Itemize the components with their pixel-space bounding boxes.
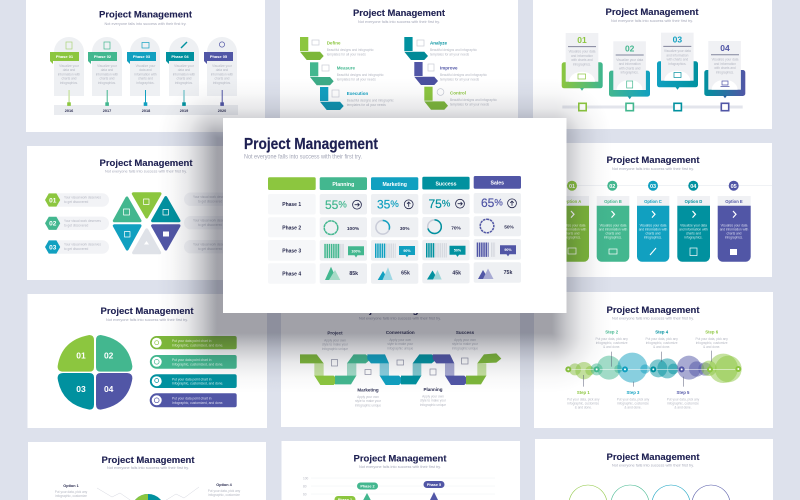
phase 05 card: Visualize your: [212, 64, 233, 68]
label: marketing: Apply your own: [357, 395, 379, 399]
card 01: with charts and: [571, 58, 593, 62]
option C: infographics.: [644, 236, 662, 240]
panel: peak chart (cropped): Phase 2: [360, 485, 375, 489]
step: execution: Beautiful designs and infographic: [347, 98, 394, 102]
bar item 1: [150, 336, 237, 349]
label: planning: infographic unique: [420, 403, 446, 407]
option D: Option D: [685, 199, 702, 204]
step 1 label: infographic, customize: [567, 402, 599, 406]
phase 03 card: charts and: [138, 77, 153, 81]
card 01: 01: [577, 35, 587, 45]
option E: 05: [731, 184, 737, 190]
label: project: Apply your own: [324, 338, 346, 342]
hexagon chart: [114, 194, 179, 253]
list item 02: 02: [49, 221, 57, 228]
center panel: project management table: [223, 118, 566, 313]
panel: option cards: Not everyone falls into success with their first try.: [612, 167, 694, 171]
petal chart: 02: [104, 351, 114, 361]
zigzag ribbon: [300, 353, 501, 385]
card 01: [562, 33, 603, 111]
list item 01: to get discovered: [64, 200, 89, 204]
column: success: %: [442, 198, 451, 210]
bar item 1: Put your data point chart in: [172, 339, 212, 343]
step: analyze: templates for all your needs: [430, 52, 470, 56]
card 02: with charts and: [619, 66, 641, 70]
card 02: 02: [625, 43, 635, 53]
label: conversation: infographic unique: [387, 346, 414, 350]
label: conversation: Conversation: [386, 330, 415, 335]
row labels: Phase 3: [282, 248, 301, 254]
step: execution: Execution: [347, 91, 368, 96]
bubble chart: [566, 351, 742, 387]
step: improve: templates for all your needs: [440, 78, 480, 82]
panel: numbered cards on timeline: Not everyone falls into success with their first try.: [611, 19, 693, 23]
right pills: [184, 192, 244, 253]
step 4 label: Put your data, pick any: [645, 337, 678, 341]
panel: donut options (cropped): [28, 442, 266, 500]
petal chart: 04: [104, 384, 114, 394]
right pills: to get discovered: [198, 200, 223, 204]
card 04: 04: [720, 43, 730, 53]
panel: hexagon of triangles: [27, 146, 266, 280]
phase 02 card: data and: [101, 68, 113, 72]
option D: 04: [690, 184, 697, 190]
panel: four petal chart: [28, 294, 267, 428]
petal chart: 01: [76, 351, 86, 361]
phase 05 card: 2020: [218, 109, 226, 113]
phase 04 card: infographics.: [175, 81, 193, 85]
phase 02 card: Phase 02: [94, 54, 112, 59]
list item 01: 01: [49, 197, 57, 204]
label: success: infographic unique: [452, 346, 478, 350]
option A: and information with: [558, 228, 586, 232]
list item 01: Your visual work deserves: [64, 196, 101, 200]
header row: [268, 176, 521, 190]
list item 03: to get discovered: [64, 247, 89, 251]
step: control: [424, 87, 497, 110]
option E: Visualize your data: [721, 224, 748, 228]
column: success: [422, 194, 470, 283]
panel: overlapping circles steps: Project Management: [606, 305, 700, 316]
phase 04 card: data and: [178, 68, 190, 72]
panel: timeline of phases: Not everyone falls into success with their first try.: [104, 22, 186, 26]
panel: arcs (cropped): Project Management: [606, 452, 700, 463]
bar item 4: Infographic, customized, and done.: [172, 401, 223, 405]
label: marketing: infographic unique: [355, 403, 381, 407]
card 03: Visualize your data: [664, 49, 691, 53]
step 3 label: infographic, customize: [617, 402, 649, 406]
panel: elbow process steps: Not everyone falls into success with their first try.: [358, 20, 440, 24]
phase 01 card: information with: [58, 72, 80, 76]
petal chart: [58, 335, 132, 410]
step 3 label: [617, 390, 650, 410]
card 01: infographics.: [573, 62, 591, 66]
option C: Visualize your data: [640, 224, 667, 228]
column: sales: 75k: [504, 270, 512, 276]
step 1 label: [567, 390, 600, 410]
column: success: 50%: [454, 249, 462, 253]
card 03: 03: [673, 34, 682, 44]
row labels: Phase 1: [282, 202, 301, 208]
step: improve: [414, 62, 487, 85]
panel: donut options (cropped): Option 1: [63, 484, 79, 488]
card 02: and information: [619, 62, 641, 66]
step: analyze: [404, 37, 477, 60]
panel: elbow process steps: [280, 0, 518, 119]
column: planning: %: [338, 199, 347, 210]
bar item 3: [150, 374, 237, 388]
header row: Success: [435, 181, 457, 187]
phase 03 card: information with: [134, 72, 157, 76]
column: marketing: 30%: [400, 226, 410, 232]
step 6 label: infographic, customize: [696, 341, 728, 345]
list item 01: [45, 193, 109, 207]
label: marketing: style to make your: [355, 399, 382, 403]
label: success: [452, 330, 479, 364]
panel: four petal chart: Not everyone falls into success with their first try.: [106, 318, 188, 322]
option D: charts and: [686, 232, 701, 236]
option B: and information with: [599, 228, 627, 232]
right pills: to get discovered: [198, 247, 223, 251]
bar item 3: Infographic, customized, and done.: [172, 382, 223, 386]
step 2 label: & and done.: [603, 345, 620, 349]
panel: zigzag arrow flow: Project Management: [354, 305, 447, 316]
phase 05 card: [204, 37, 237, 113]
step 4 label: & and done.: [653, 345, 670, 349]
panel: zigzag arrow flow: [281, 290, 520, 427]
right pills: Your visual work deserves: [193, 218, 230, 222]
bar item 2: [150, 355, 237, 369]
phase 01 card: 2016: [65, 109, 73, 113]
step 2 label: infographic, customize: [596, 341, 628, 345]
bar item 3: Put your data point chart in: [172, 377, 212, 381]
option E: [718, 181, 751, 262]
header row: Planning: [332, 182, 354, 188]
column: sales: 65: [481, 196, 494, 210]
phase 05 card: Phase 05: [210, 54, 228, 59]
option B: Visualize your data: [600, 224, 627, 228]
right pills: Your visual work deserves: [193, 195, 230, 199]
label: conversation: [386, 330, 415, 365]
option A: charts and: [565, 232, 580, 236]
list item 03: Your visual work deserves: [64, 242, 101, 246]
step 5 label: infographic, customize: [667, 402, 699, 406]
column: sales: 50%: [504, 225, 515, 231]
panel: arcs (cropped): Not everyone falls into success with their first try.: [612, 464, 694, 468]
card 01: and information: [571, 54, 593, 58]
label: conversation: Apply your own: [389, 338, 411, 342]
card 03: and information: [666, 53, 689, 57]
label: planning: Planning: [424, 387, 443, 392]
column: marketing: %: [390, 199, 399, 210]
step 3 label: Put your data, pick any: [617, 398, 650, 402]
column: marketing: 35: [377, 198, 390, 212]
step: measure: Measure: [337, 66, 355, 70]
right pills: Your visual work deserves: [193, 242, 230, 246]
phase 03 card: [127, 37, 160, 113]
phase 01 card: Phase 01: [56, 54, 74, 59]
option B: infographics.: [604, 236, 622, 240]
panel: four petal chart: Project Management: [100, 306, 194, 317]
panel: arcs (cropped): [535, 439, 773, 500]
subtitle: Not everyone falls into success with their first try.: [244, 154, 362, 160]
label: project: style to make your: [322, 342, 349, 346]
phase 02 card: information with: [96, 72, 118, 76]
step 5 label: [667, 390, 700, 410]
step: execution: templates for all your needs: [347, 103, 386, 107]
step: improve: Beautiful designs and infographic: [440, 73, 487, 77]
header row: Marketing: [382, 182, 407, 188]
phase 05 card: charts and: [215, 77, 230, 81]
panel: peak chart (cropped): Project Management: [354, 454, 447, 465]
card 02: Visualize your data: [616, 58, 643, 62]
panel: peak chart (cropped): Not everyone falls into success with their first try.: [359, 465, 441, 469]
phase 01 card: infographics.: [60, 81, 78, 85]
option D: [677, 181, 710, 262]
panel: donut options (cropped): infographic, customize: [208, 493, 240, 497]
column: sales: [474, 193, 521, 283]
phase 05 card: infographics.: [213, 81, 231, 85]
column: marketing: 65k: [401, 271, 410, 277]
list item 03: 03: [49, 244, 57, 251]
option E: and information with: [720, 228, 748, 232]
bar item 2: Infographic, customized, and done.: [172, 362, 223, 366]
bar item 1: Infographic, customized, and done.: [172, 343, 223, 347]
panel: peak chart (cropped): 80: [303, 484, 307, 488]
column: planning: [320, 194, 367, 284]
column: planning: 100%: [351, 249, 361, 253]
label: project: Project: [327, 331, 343, 336]
row labels: [268, 194, 316, 284]
step: define: Define: [327, 40, 341, 46]
panel: overlapping circles steps: [534, 292, 773, 428]
column: marketing: 90%: [403, 249, 411, 253]
step: control: templates for all your needs: [450, 102, 490, 106]
step: define: Beautiful designs and infographic: [327, 48, 374, 52]
column: sales: %: [494, 197, 503, 208]
list item 02: Your visual work deserves: [64, 219, 101, 223]
panel: timeline of phases: Project Management: [99, 10, 193, 20]
step: measure: Beautiful designs and infographic: [337, 73, 384, 77]
step 6 label: Step 6: [705, 330, 719, 334]
card 01: Visualize your data: [569, 50, 596, 54]
step 4 label: Step 4: [655, 330, 669, 334]
option A: infographics.: [563, 236, 581, 240]
step: measure: templates for all your needs: [337, 78, 376, 82]
step 2 label: [595, 330, 628, 349]
list item 02: to get discovered: [64, 223, 89, 227]
option D: and information with: [679, 228, 708, 232]
list item 02: [45, 217, 109, 230]
label: marketing: [355, 370, 382, 407]
step 2 label: Step 2: [605, 330, 619, 334]
card 02: infographics.: [621, 71, 639, 75]
option D: Visualize your data: [680, 224, 707, 228]
phase 02 card: infographics.: [98, 81, 116, 85]
phase 04 card: information with: [173, 72, 195, 76]
column: success: 75: [428, 197, 442, 211]
option C: Option C: [644, 199, 662, 204]
phase 01 card: data and: [63, 68, 75, 72]
petal chart: 03: [76, 384, 86, 394]
step 4 label: [645, 330, 678, 349]
step 6 label: Put your data, pick any: [695, 337, 728, 341]
step 5 label: Step 5: [677, 390, 690, 395]
step 4 label: infographic, customize: [646, 341, 678, 345]
phase 03 card: infographics.: [136, 81, 155, 85]
option E: infographics.: [725, 236, 743, 240]
phase 04 card: Phase 04: [171, 54, 189, 59]
label: planning: Apply your own: [422, 394, 444, 398]
step: control: Beautiful designs and infographic: [450, 98, 497, 102]
phase 01 card: [50, 37, 84, 113]
step 1 label: Put your data, pick any: [567, 398, 600, 402]
panel: numbered cards on timeline: Project Management: [606, 7, 699, 18]
option C: 03: [650, 184, 656, 190]
column: planning: 100%: [347, 226, 360, 232]
panel: donut options (cropped): Put your data, pick any: [55, 490, 88, 494]
phase 02 card: 2017: [103, 109, 111, 113]
card 04: [704, 41, 745, 111]
phase 04 card: charts and: [177, 77, 192, 81]
step 3 label: Step 3: [627, 390, 640, 395]
phase 01 card: charts and: [62, 77, 77, 81]
phase 04 card: 2019: [180, 109, 188, 113]
phase 04 card: Visualize your: [174, 64, 195, 68]
option B: [597, 181, 629, 262]
bar item 4: Put your data point chart in: [172, 396, 212, 400]
panel: zigzag arrow flow: Not everyone falls into success with their first try.: [359, 316, 441, 320]
step 2 label: Put your data, pick any: [595, 337, 628, 341]
step: execution: [320, 87, 394, 110]
panel: peak chart (cropped): 60: [303, 492, 307, 496]
column: success: 70%: [451, 225, 462, 231]
panel: numbered cards on timeline: [533, 0, 772, 129]
phase 05 card: information with: [211, 72, 233, 76]
panel: donut options (cropped): infographic, customize: [55, 494, 87, 498]
label: project: [322, 331, 349, 366]
row labels: Phase 4: [282, 271, 301, 277]
phase 04 card: [166, 37, 199, 113]
phase 02 card: Visualize your: [97, 64, 118, 68]
option A: [556, 181, 589, 262]
panel: option cards: Project Management: [606, 155, 700, 166]
panel: option cards: [533, 143, 772, 277]
panel: donut options (cropped): Option 4: [216, 483, 233, 487]
row labels: Phase 2: [282, 225, 301, 231]
panel: peak chart (cropped): 100: [303, 476, 309, 480]
bar item 2: Put your data point chart in: [172, 358, 212, 362]
step: analyze: Analyze: [430, 40, 448, 46]
option A: Visualize your data: [559, 224, 586, 228]
label: success: style to make your: [452, 342, 479, 346]
phase 02 card: charts and: [100, 77, 115, 81]
card 02: [609, 41, 650, 111]
card 04: infographics.: [716, 70, 734, 74]
column: planning: 55: [325, 198, 338, 212]
panel: donut options (cropped): Put your data, pick any: [208, 489, 241, 493]
phase 03 card: Phase 03: [133, 54, 151, 59]
label: marketing: Marketing: [357, 388, 379, 393]
bar item 4: [150, 393, 237, 407]
card 03: with charts and: [667, 58, 688, 62]
phase 02 card: [88, 37, 122, 113]
card 03: infographics.: [668, 62, 687, 66]
step 1 label: Step 1: [577, 390, 590, 395]
label: conversation: style to make your: [387, 342, 414, 346]
label: success: Success: [456, 330, 475, 335]
panel: timeline of phases: [26, 0, 265, 132]
option E: charts and: [727, 232, 742, 236]
card 04: with charts and: [714, 66, 736, 70]
step: control: Control: [450, 90, 466, 96]
label: success: Apply your own: [454, 338, 476, 342]
step 6 label: [695, 330, 728, 349]
column: sales: 90%: [504, 248, 512, 252]
panel: donut options (cropped): Project Management: [102, 455, 195, 466]
step: analyze: Beautiful designs and infographic: [430, 48, 477, 52]
option E: Option E: [725, 199, 743, 204]
card 03: [657, 33, 698, 111]
title: Project Management: [244, 136, 378, 153]
card 04: and information: [714, 62, 736, 66]
option B: Option B: [604, 199, 622, 204]
center panel shadow: [157, 78, 612, 393]
option C: and information with: [639, 228, 667, 232]
label: planning: style to make your: [420, 398, 447, 402]
step: measure: [310, 62, 384, 85]
step: define: [300, 37, 374, 60]
label: planning: [420, 369, 447, 407]
step 1 label: & and done.: [575, 406, 592, 410]
panel: peak chart (cropped): Phase 5: [427, 483, 441, 487]
list item 03: [45, 240, 109, 254]
option B: 02: [609, 184, 615, 190]
panel: donut options (cropped): Not everyone falls into success with their first try.: [107, 466, 189, 470]
step 3 label: & and done.: [624, 406, 642, 410]
panel: hexagon of triangles: Project Management: [100, 158, 193, 169]
phase 03 card: 2018: [142, 109, 150, 113]
step 6 label: & and done.: [703, 345, 720, 349]
column: marketing: [371, 194, 418, 284]
step 5 label: & and done.: [674, 406, 692, 410]
step: improve: Improve: [440, 66, 458, 70]
panel: peak chart (cropped): [282, 441, 520, 500]
option D: infographics.: [684, 236, 703, 240]
card 04: Visualize your data: [712, 58, 739, 62]
step: define: templates for all your needs: [327, 52, 366, 56]
option A: 01: [569, 184, 575, 190]
phase 03 card: data and: [139, 68, 152, 72]
step 5 label: Put your data, pick any: [667, 398, 700, 402]
option A: Option A: [564, 199, 581, 204]
panel: overlapping circles steps: Not everyone falls into success with their first try.: [612, 317, 694, 321]
phase 01 card: Visualize your: [59, 64, 80, 68]
phase 03 card: Visualize your: [136, 64, 156, 68]
panel: elbow process steps: Project Management: [353, 8, 446, 19]
label: project: infographic unique: [322, 347, 348, 351]
right pills: to get discovered: [198, 223, 223, 227]
option C: [637, 181, 669, 262]
header row: Sales: [491, 180, 504, 186]
column: planning: 85k: [349, 271, 358, 277]
option B: charts and: [606, 232, 621, 236]
column: success: 45k: [452, 270, 461, 276]
panel: hexagon of triangles: Not everyone falls into success with their first try.: [105, 170, 187, 174]
option C: charts and: [646, 232, 661, 236]
phase 05 card: data and: [216, 68, 228, 72]
